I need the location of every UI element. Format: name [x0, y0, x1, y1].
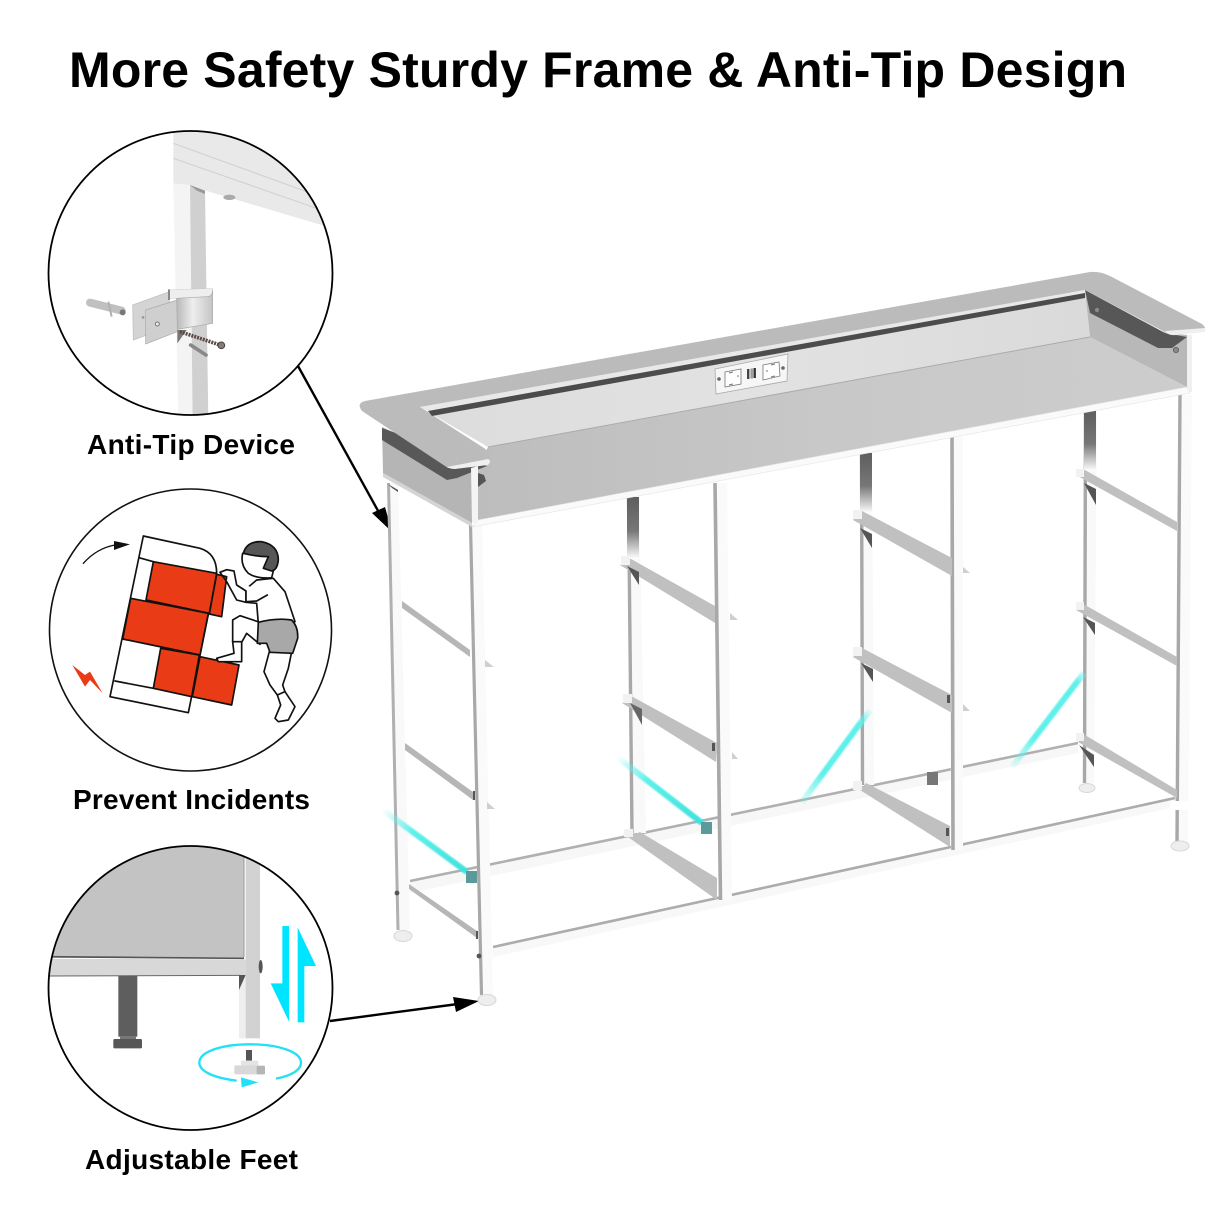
back wall: [420, 290, 1090, 447]
panel: prevent incidents: [50, 489, 332, 771]
dark gussets and clips: [388, 483, 1096, 958]
red drawers: [123, 562, 239, 705]
tab front edges: [447, 328, 1205, 469]
title: More Safety Sturdy Frame & Anti-Tip Design: [69, 42, 1127, 98]
child: hair: [243, 542, 278, 571]
left tab post stub: [471, 466, 478, 523]
label: anti-tip device: Anti-Tip Device: [87, 429, 295, 460]
bottom rails: [410, 743, 1175, 957]
leader arrow: anti-tip device to frame: [298, 366, 392, 532]
illustration: child climbing tipping dresser: [72, 536, 298, 722]
child: arm: [220, 570, 267, 602]
child: standing leg: [264, 652, 295, 722]
front shelf edge: [472, 387, 1190, 527]
shelf floor: [478, 337, 1187, 520]
dark under-top band right: [1085, 290, 1187, 348]
drawer rails fourth column: [1076, 470, 1177, 798]
close-up: wall bracket on post: [86, 132, 323, 414]
strip end clips: [466, 772, 938, 883]
left side panel: [382, 427, 472, 523]
rear posts: [627, 411, 1097, 833]
wiring slot: [428, 293, 1085, 416]
small post tabs: [485, 567, 970, 809]
side rungs left column: [402, 601, 477, 938]
panel: anti-tip device: [48, 120, 340, 420]
tabletop: [360, 272, 1205, 468]
close-up: table foot with adjustment arrows: [40, 840, 316, 1087]
wall floor crease: [488, 337, 1090, 447]
leader arrow: adjustable feet to foot: [330, 997, 479, 1021]
right end post: [1187, 335, 1192, 393]
impact bolt: [72, 665, 103, 693]
tip direction arrow: [83, 545, 115, 563]
front posts: [387, 395, 1192, 1006]
child: torso: [246, 578, 295, 623]
right side wall: [1085, 292, 1187, 387]
dresser body: [110, 536, 217, 713]
power outlet strip: [715, 354, 788, 394]
label: prevent incidents: Prevent Incidents: [73, 784, 310, 815]
drawer rails second column: [620, 559, 717, 900]
cyan light strips: [383, 673, 1084, 872]
white rail brackets: [621, 469, 1084, 837]
child: shorts: [257, 619, 298, 653]
child: face: [242, 551, 274, 578]
label: adjustable feet: Adjustable Feet: [85, 1144, 298, 1175]
product: console table with frame: [360, 272, 1205, 1005]
dark under-top band left: [382, 428, 487, 480]
screws on right wall: [1094, 307, 1179, 353]
tabletop light inner lip: [420, 290, 1085, 412]
panel: adjustable feet: [40, 840, 332, 1130]
dresser divider lines: [115, 558, 153, 688]
child: raised leg: [217, 616, 260, 662]
drawer rails third column: [853, 511, 952, 847]
